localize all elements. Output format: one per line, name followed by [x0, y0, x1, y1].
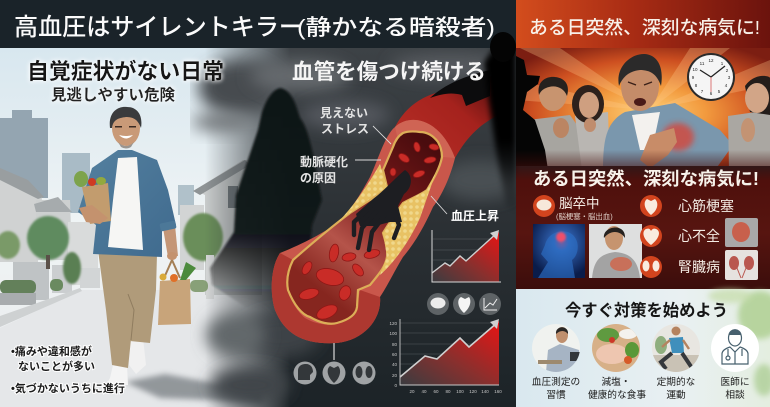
clock: 7 — [701, 89, 704, 94]
chart: large blood pressure line with axes: 140 — [481, 389, 489, 394]
photo: man clutching chest — [589, 224, 642, 278]
clock: 2 — [726, 68, 729, 73]
shoes — [129, 342, 146, 374]
reaper silhouette top right — [484, 48, 516, 215]
annotation: blood pressure rise: 血圧上昇 — [451, 208, 499, 223]
right header: ある日突然、深刻な病気に! — [529, 17, 760, 38]
stroke item — [533, 195, 613, 221]
chart: large blood pressure line with axes: 60 — [392, 352, 397, 357]
clock: 11 — [700, 61, 705, 66]
chart: large blood pressure line with axes: 120 — [469, 389, 477, 394]
icons: brain heart kidney — [294, 362, 376, 384]
distant towers — [0, 110, 194, 215]
kidney disease item — [640, 256, 720, 278]
step: low salt diet — [588, 324, 646, 401]
clock — [687, 53, 735, 101]
panel: sudden illness photo — [516, 48, 770, 170]
clock: 4 — [725, 83, 728, 88]
stroke item: (脳梗塞・脳出血) — [556, 212, 613, 221]
chart: small blood pressure rise — [432, 230, 501, 282]
chart: large blood pressure line with axes: 160 — [494, 389, 502, 394]
step: regular exercise: 運動 — [666, 388, 686, 401]
icons: brain heart graph row — [427, 293, 501, 315]
darker lower ring — [272, 253, 380, 343]
step: blood pressure habit: 血圧測定の — [532, 375, 580, 388]
myocardial infarction item — [640, 195, 734, 217]
woman — [572, 85, 610, 170]
myocardial infarction item: 心筋梗塞 — [678, 198, 734, 214]
head — [112, 117, 140, 146]
left trees and hedges — [0, 216, 81, 305]
reaper head over the title — [490, 32, 516, 62]
photo: brain scan — [533, 224, 585, 278]
step: consult a doctor: 医師に — [720, 375, 750, 388]
foliage bokeh — [708, 289, 770, 396]
clock: 5 — [718, 89, 721, 94]
step: consult a doctor — [711, 324, 759, 401]
panel: serious diseases — [516, 150, 770, 289]
man shadow on road — [125, 374, 262, 402]
lumen with yellow lining — [287, 131, 442, 324]
hair — [110, 107, 141, 128]
chart: large blood pressure line with axes: 40 — [392, 362, 397, 367]
thumbnail: chest — [725, 218, 758, 247]
right grocery bag — [164, 260, 180, 278]
left grocery bag — [82, 183, 111, 224]
vessel outer wall — [272, 120, 455, 343]
chart: large blood pressure line with axes: 20 — [409, 389, 415, 394]
label lines — [334, 126, 447, 360]
heart failure item — [640, 225, 720, 247]
kidney disease item: 腎臓病 — [678, 259, 720, 275]
forearm — [164, 228, 178, 256]
khaki trousers — [98, 250, 157, 368]
stroke item: 脳卒中 — [559, 196, 600, 211]
heading: keeps damaging blood vessels: 血管を傷つけ続ける — [292, 60, 486, 84]
rays — [516, 48, 770, 110]
step: regular exercise — [652, 324, 700, 401]
clock: 1 — [721, 61, 724, 66]
annotation: invisible stress: ストレス — [321, 122, 369, 136]
chart: large blood pressure line with axes: 100 — [456, 389, 464, 394]
hooded reaper silhouette left — [210, 88, 322, 310]
clock: 12 — [708, 58, 714, 63]
panel: dark central scene — [190, 48, 520, 407]
chart: large blood pressure line with axes: 40 — [421, 389, 427, 394]
annotation: cause of arteriosclerosis: の原因 — [300, 171, 336, 185]
step: blood pressure habit — [532, 324, 580, 401]
bullet list: •痛みや違和感が — [11, 344, 92, 358]
chart: large blood pressure line with axes: 60 — [433, 389, 439, 394]
annotation: invisible stress: 見えない — [320, 106, 368, 120]
clock: 6 — [710, 91, 713, 96]
heart failure item: 心不全 — [678, 228, 720, 244]
chart: large blood pressure line with axes: 0 — [394, 383, 397, 388]
clock: 3 — [728, 75, 731, 80]
upper ring — [395, 120, 455, 158]
clock: 10 — [692, 67, 698, 72]
road — [28, 290, 218, 316]
white t-shirt — [108, 157, 143, 250]
black claw hand — [354, 170, 411, 250]
right plaque — [380, 172, 436, 275]
left man — [534, 76, 582, 166]
thumbnail: kidneys — [725, 250, 758, 280]
bullet list: ないことが多い — [18, 359, 95, 373]
heading: 今すぐ対策を始めよう — [565, 300, 728, 320]
heading: daily life without symptoms — [27, 59, 224, 104]
bullet list: •気づかないうちに進行 — [11, 381, 125, 395]
heading: daily life without symptoms: 自覚症状がない日常 — [27, 59, 224, 84]
clock: 8 — [695, 83, 698, 88]
man walking with groceries — [74, 107, 196, 385]
step: blood pressure habit: 習慣 — [546, 388, 566, 401]
chart: large blood pressure line with axes: 80 — [445, 389, 451, 394]
clouds — [192, 54, 520, 403]
silhouette — [516, 56, 548, 170]
chart: large blood pressure line with axes: 100 — [389, 331, 397, 336]
left houses — [0, 168, 100, 300]
top-right reaper arm — [430, 70, 490, 106]
right header — [516, 0, 770, 48]
title bar: (静かなる暗殺者) — [297, 15, 495, 40]
subheading: ある日突然、深刻な病気に! — [533, 168, 759, 189]
red blood cells — [298, 141, 439, 322]
step: regular exercise: 定期的な — [657, 375, 696, 388]
right houses — [180, 160, 262, 299]
heading: daily life without symptoms: 見逃しやすい危険 — [51, 85, 175, 104]
denim shirt — [78, 150, 176, 257]
main man in pain — [603, 54, 733, 170]
right woman — [728, 76, 770, 170]
vessel back section — [395, 72, 505, 170]
step: low salt diet: 健康的な食事 — [588, 388, 646, 401]
panel: start countermeasures now — [516, 289, 770, 407]
chart: large blood pressure line with axes: 20 — [392, 373, 397, 378]
blood vessel cross-section — [272, 70, 505, 343]
smile — [119, 135, 133, 138]
step: low salt diet: 減塩・ — [601, 375, 631, 388]
chart: large blood pressure line with axes — [389, 319, 502, 394]
annotation: cause of arteriosclerosis: 動脈硬化 — [300, 154, 348, 169]
clock: 9 — [692, 75, 695, 80]
chart: large blood pressure line with axes: 80 — [392, 342, 397, 347]
title bar — [0, 0, 516, 48]
title bar: 高血圧はサイレントキラー — [14, 14, 303, 41]
step: consult a doctor: 相談 — [725, 388, 745, 401]
left plaque — [338, 164, 387, 222]
chart: large blood pressure line with axes: 120 — [389, 321, 397, 326]
panel: daily life street scene — [0, 48, 300, 407]
